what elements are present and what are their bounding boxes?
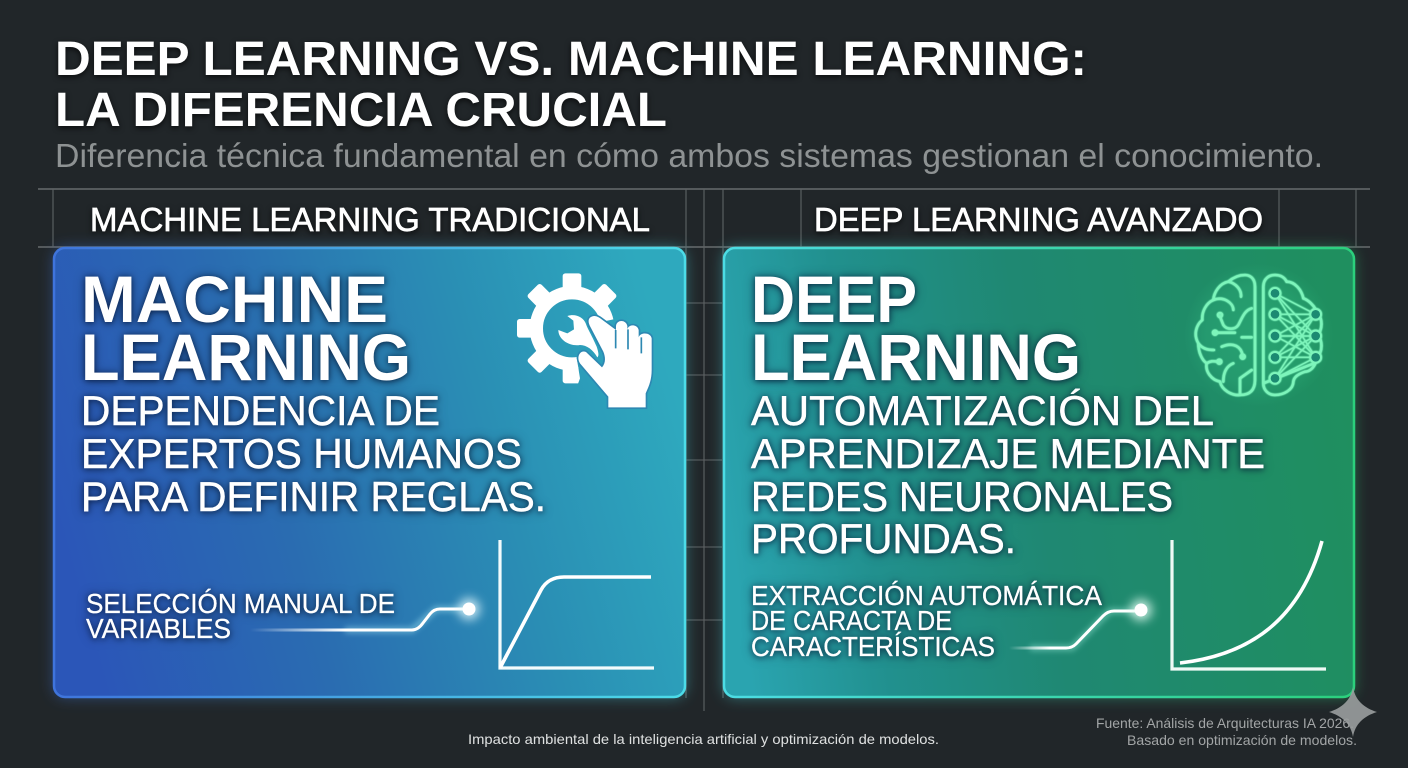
- icon: neural brain: [1183, 263, 1333, 407]
- source note: Basado en optimización de modelos.: [1127, 732, 1357, 748]
- heading: machine learning: [81, 262, 411, 394]
- text: deep learning description: REDES NEURONALES: [751, 473, 1173, 520]
- subtitle: Diferencia técnica fundamental en cómo ambos sistemas gestionan el conocimiento.: [55, 137, 1323, 174]
- text: machine learning description: EXPERTOS HUMANOS: [81, 430, 522, 477]
- title: DEEP LEARNING VS. MACHINE LEARNING:: [55, 33, 1087, 86]
- heading: machine learning: MACHINE: [81, 262, 388, 336]
- text: deep learning description: AUTOMATIZACIÓN DEL: [751, 387, 1214, 434]
- heading: deep learning: DEEP: [751, 262, 917, 336]
- panel: deep learning: [723, 247, 1355, 698]
- arrow: connector to chart: [250, 598, 480, 630]
- title: [55, 33, 1087, 137]
- arrow: connector to chart: [1009, 599, 1152, 648]
- source note: Fuente: Análisis de Arquitecturas IA 2026.: [1096, 715, 1354, 731]
- text: callout selección manual: SELECCIÓN MANUAL DE: [86, 588, 395, 619]
- heading: deep learning: LEARNING: [751, 320, 1081, 394]
- chart: exponential curve: [1172, 540, 1326, 669]
- text: callout extracción automática: [751, 580, 1102, 662]
- text: deep learning description: APRENDIZAJE MEDIANTE: [751, 430, 1265, 477]
- heading: deep learning: [751, 262, 1081, 394]
- text: callout extracción automática: EXTRACCIÓN AUTOMÁTICA: [751, 580, 1102, 611]
- chart: plateau curve: [500, 540, 654, 668]
- column heading: machine learning: MACHINE LEARNING TRADICIONAL: [90, 201, 650, 238]
- text: deep learning description: PROFUNDAS.: [751, 515, 1016, 562]
- text: callout extracción automática: CARACTERÍSTICAS: [751, 631, 995, 662]
- text: deep learning description: [751, 387, 1265, 562]
- panel: machine learning: [53, 247, 686, 698]
- source note: [1096, 715, 1357, 748]
- title: LA DIFERENCIA CRUCIAL: [55, 84, 667, 137]
- text: machine learning description: PARA DEFINIR REGLAS.: [81, 473, 546, 520]
- footer caption: Impacto ambiental de la inteligencia artificial y optimización de modelos.: [468, 731, 939, 747]
- text: callout selección manual: VARIABLES: [86, 613, 231, 644]
- icon: gear with wrench and hand: [517, 273, 652, 407]
- heading: machine learning: LEARNING: [81, 320, 411, 394]
- text: machine learning description: DEPENDENCIA DE: [81, 387, 440, 434]
- text: callout extracción automática: DE CARACTA DE: [751, 605, 952, 636]
- icon: sparkle star: [1329, 687, 1377, 737]
- text: callout selección manual: [86, 588, 395, 644]
- column heading: deep learning: DEEP LEARNING AVANZADO: [814, 201, 1263, 238]
- text: machine learning description: [81, 387, 546, 520]
